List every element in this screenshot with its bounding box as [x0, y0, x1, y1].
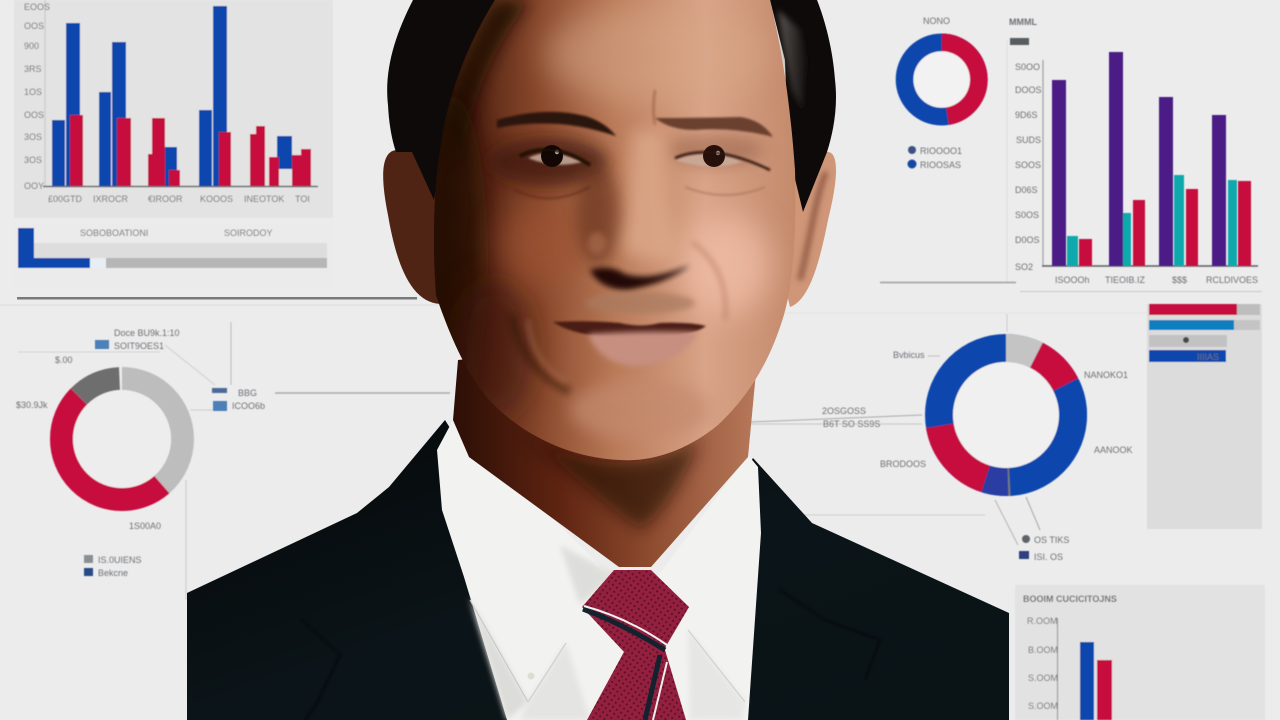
panel: top-right small donut: NONO	[923, 16, 950, 26]
donut labels: 2OSGOSS	[822, 406, 866, 416]
x axis labels: KOOOS	[200, 194, 233, 204]
donut labels: BRODOOS	[880, 459, 926, 469]
suit	[187, 420, 1009, 720]
y axis labels: D0OS	[1015, 235, 1040, 245]
nasolabial folds	[692, 242, 726, 320]
panel: top-right bar chart	[880, 17, 1262, 292]
panel: bottom-right bar chart	[1015, 585, 1265, 720]
x axis labels: INEOTOK	[244, 194, 284, 204]
x axis labels	[1055, 275, 1258, 285]
donut labels: ICOO6b	[232, 401, 265, 411]
y axis labels: 3OS	[24, 132, 42, 142]
x axis labels: TOI	[295, 194, 310, 204]
panel: lower-right donut chart	[750, 313, 1147, 562]
donut labels: IS.0UIENS	[98, 555, 142, 565]
y axis labels: 3OS	[24, 155, 42, 165]
y axis labels: OOS	[24, 21, 44, 31]
y axis labels: OOY	[24, 181, 44, 191]
x axis labels: ISOOOh	[1055, 275, 1090, 285]
panel: top-right small donut: RIOOSAS	[920, 160, 961, 170]
panel: bottom-right bar chart: B.OOM	[1028, 645, 1058, 655]
x axis labels	[48, 194, 310, 204]
donut labels	[16, 328, 265, 578]
shirt and collar	[437, 420, 761, 720]
panel: top-right bar chart: MMML	[1009, 17, 1037, 27]
panel: lower-left donut chart	[0, 305, 450, 600]
panel: bottom-right bar chart: R.OOM	[1027, 616, 1058, 626]
panel: top-left progress strip: SOBOBOATIONI	[80, 228, 148, 238]
donut labels: $30.9Jk	[16, 400, 48, 410]
donut labels	[822, 350, 1133, 562]
bars	[1052, 52, 1226, 266]
panel: top-left bar chart	[14, 0, 333, 218]
eye sockets	[488, 138, 608, 186]
donut labels: $.00	[55, 355, 73, 365]
face	[412, 0, 795, 460]
donut labels: ISI. OS	[1034, 552, 1063, 562]
donut labels: SOIT9OES1	[114, 341, 164, 351]
y axis labels: DOOS	[1015, 85, 1042, 95]
panel: bottom-right bar chart: BOOIM CUCICITOJNS	[1023, 594, 1117, 604]
donut labels: OS TIKS	[1034, 535, 1069, 545]
mouth	[553, 321, 706, 366]
right cheek highlight	[680, 215, 770, 315]
panel: top-left progress strip	[14, 221, 333, 287]
y axis labels: 9D6S	[1015, 110, 1038, 120]
donut labels: Bekcne	[98, 568, 128, 578]
donut labels: B6T SO SS9S	[823, 419, 880, 429]
panel: top-right small donut: RIOOOO1	[920, 146, 962, 156]
y axis labels: SUDS	[1016, 135, 1041, 145]
donut labels: NANOKO1	[1084, 370, 1128, 380]
y axis labels: S0OS	[1015, 210, 1039, 220]
panel: bottom-right bar chart: S.OOM	[1028, 673, 1058, 683]
x axis labels: TIEOIB.IZ	[1105, 275, 1146, 285]
y axis labels: SO2	[1015, 262, 1033, 272]
y axis labels: 900	[24, 41, 39, 51]
y axis labels: 1OS	[24, 87, 42, 97]
necktie	[582, 570, 689, 720]
hairline shadow	[448, 0, 535, 149]
x axis labels: €IROOR	[148, 194, 183, 204]
nose	[618, 130, 678, 262]
donut labels: Doce BU9k.1:10	[114, 328, 180, 338]
donut	[62, 378, 182, 500]
panel: top-right small donut	[905, 16, 979, 170]
brow furrow	[654, 90, 655, 125]
philtrum	[585, 292, 695, 314]
person portrait	[187, 0, 1009, 720]
y axis labels: SOOS	[1015, 160, 1041, 170]
x axis labels: RCLDIVOES	[1206, 275, 1258, 285]
eyes	[515, 145, 770, 198]
neck shadow	[520, 430, 700, 530]
x axis labels: IXROCR	[93, 194, 129, 204]
panel: right-side horizontal bars: IIIIAS	[1197, 352, 1219, 362]
panel: bottom-right bar chart: S.OOM	[1028, 701, 1058, 711]
y axis labels	[1015, 62, 1042, 272]
ears	[383, 150, 836, 307]
panel: top-left progress strip: SOIRODOY	[224, 228, 273, 238]
y axis labels: 3RS	[24, 64, 42, 74]
left cheek	[484, 203, 556, 290]
eyebrows	[497, 112, 773, 137]
y axis labels: S0OO	[1015, 62, 1040, 72]
forehead highlight	[534, 1, 682, 109]
x axis labels: £00GTD	[48, 194, 83, 204]
donut labels: AANOOK	[1094, 445, 1133, 455]
left face shadow	[434, 102, 506, 390]
hair	[387, 0, 836, 212]
y axis labels: OOS	[24, 110, 44, 120]
donut labels: 1S00A0	[129, 521, 161, 531]
chin	[570, 380, 710, 440]
y axis labels	[24, 2, 50, 191]
donut labels: Bvbicus	[893, 350, 925, 360]
x axis labels: $$$	[1172, 275, 1187, 285]
donut labels: BBG	[238, 388, 257, 398]
bars	[52, 6, 292, 186]
y axis labels: D06S	[1015, 185, 1038, 195]
y axis labels: EOOS	[24, 2, 50, 12]
neck	[453, 330, 760, 567]
panel: right-side horizontal bars	[1147, 304, 1262, 529]
